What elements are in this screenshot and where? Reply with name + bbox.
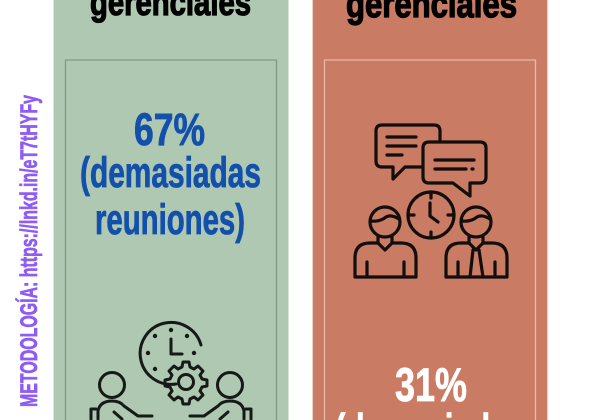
panel: right red bbox=[312, 0, 548, 420]
statistic: 67% demasiadas reuniones: 67% bbox=[134, 104, 205, 155]
icon: meeting with clock and gear bbox=[91, 322, 251, 419]
icon: conversation, clock and two people bbox=[355, 125, 507, 277]
statistic: 31% bbox=[335, 358, 525, 420]
statistic: 67% demasiadas reuniones: reuniones) bbox=[95, 196, 245, 244]
statistic: 31%: 31% bbox=[395, 358, 467, 411]
panel: left green bbox=[54, 0, 288, 420]
statistic: 67% demasiadas reuniones: (demasiadas bbox=[80, 149, 261, 197]
statistic: 67% demasiadas reuniones bbox=[80, 104, 261, 244]
